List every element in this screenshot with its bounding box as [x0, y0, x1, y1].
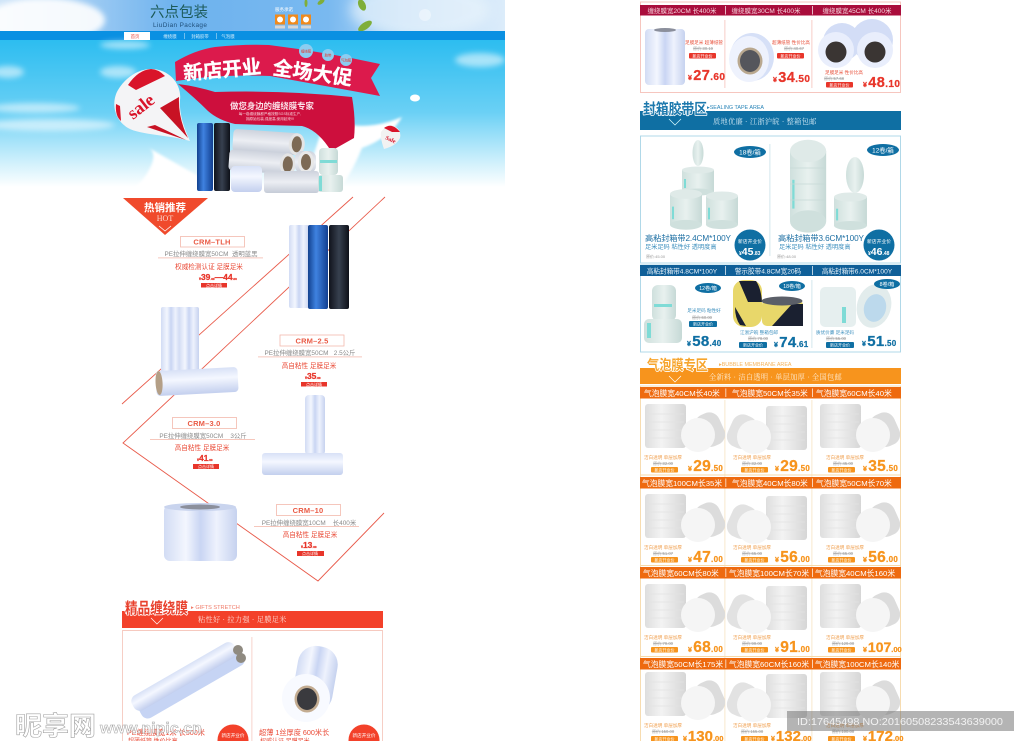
bubble film row 1: 洁白透明 单层加厚 — [733, 454, 771, 461]
product CRM-2.5: ¥35.00 — [305, 371, 321, 381]
panel: tape small: 质优价廉 足米足码 — [816, 329, 854, 336]
panel: bubble film frame — [640, 386, 901, 741]
bubble film row 1: 新店开业价 — [654, 466, 674, 472]
panel: tape large: 新店开业价 — [738, 238, 762, 245]
bubble film row 2: 气泡膜宽50CM长70米 — [816, 478, 892, 488]
roll: two upright one lying — [155, 307, 239, 396]
red diagonal lines — [122, 197, 385, 581]
tape stack 1 — [670, 140, 738, 230]
product CRM-10: 高自粘性 足膜足米 — [283, 530, 338, 539]
ribbon: 做您身边的缠绕膜专家 — [230, 101, 314, 111]
page header — [0, 0, 505, 42]
badge: 18卷/箱 — [783, 282, 801, 290]
bubble film row 4: 原价:190.00 — [832, 729, 855, 734]
panel: stretch film products: 超薄 1丝厚度 600米长 — [259, 728, 329, 737]
bubble film row 3: ¥68.00 — [688, 639, 723, 656]
panel: tape large — [640, 136, 900, 263]
panel: stretch film by size: 新店开业价 — [780, 52, 800, 58]
product CRM-2.5: PE拉伸缠绕膜宽50CM 2.5公斤 — [265, 348, 355, 357]
badge 18: 18卷/箱 — [739, 148, 761, 156]
panel: tape small: 警示胶带4.8CM宽20码 — [735, 266, 802, 276]
sale balloon — [114, 69, 190, 141]
panel: tape large: 高粘封箱带3.6CM*100Y — [778, 233, 865, 243]
bubble film row 3: 新店开业价 — [744, 646, 764, 652]
product CRM-3.0 — [150, 418, 255, 469]
product CRM-10 — [254, 504, 359, 556]
roll 30cm — [729, 33, 774, 82]
small balloon: Sale — [384, 135, 397, 145]
badge 12 — [867, 144, 899, 156]
product CRM-2.5: 高自粘性 足膜足米 — [282, 361, 337, 370]
bubble film row 3: ¥91.00 — [775, 639, 810, 656]
bubble film row 2: ¥56.00 — [775, 549, 810, 566]
bubble film row 3: 气泡膜宽40CM长160米 — [815, 568, 895, 578]
product CRM-10: ¥13.00 — [301, 540, 317, 550]
bubble film row 4: 原价:150.00 — [652, 729, 675, 734]
bubble film row 1: 新店开业价 — [832, 466, 852, 472]
product CRM-TLH: ¥39.00—44.00 — [199, 272, 237, 282]
navigation bar: 封箱胶带 — [191, 33, 209, 40]
hazard tape — [733, 280, 803, 327]
navigation bar — [0, 31, 505, 40]
bubble film row 4 — [640, 658, 904, 741]
badge 12: 12卷/箱 — [872, 146, 894, 154]
bubble film row 2: 原价:51.07 — [653, 551, 674, 556]
hot badge — [123, 198, 208, 235]
bubble film row 3: 气泡膜宽60CM长80米 — [643, 568, 719, 578]
panel: tape small: 高粘封箱带6.0CM*100Y — [822, 266, 893, 276]
roll: T shape — [262, 395, 343, 475]
logo — [150, 4, 208, 29]
bubble film row 1: 洁白透明 单层加厚 — [644, 454, 682, 461]
bubble film row 2: ¥56.00 — [863, 549, 898, 566]
bubble film row 1: 原价:32.00 — [653, 461, 674, 466]
roll 20cm — [645, 28, 685, 85]
product CRM-TLH: 点击详情 — [206, 282, 222, 288]
bubble film row 1: ¥29.50 — [688, 458, 723, 475]
sale balloon: sale — [123, 90, 158, 123]
product CRM-TLH — [158, 236, 263, 288]
panel: tape small: 新店开业价 — [830, 342, 850, 348]
panel: tape large: ¥45.83 — [739, 246, 761, 258]
panel: tape small: 原价:60.00 — [692, 315, 713, 320]
ribbon: 新店开业 — [183, 56, 262, 85]
panel: stretch film by size: 原价:57.68 — [824, 76, 845, 81]
bubble film row 2: ¥47.00 — [688, 549, 723, 566]
badge — [695, 279, 900, 293]
watermark: site logo: www.nipic.cn — [99, 721, 202, 737]
bubble film row 2 — [640, 477, 904, 566]
bubble film row 3: 原价:79.00 — [653, 641, 674, 646]
panel: stretch film by size: ¥27.60 — [688, 68, 725, 84]
tape 6.0 — [820, 280, 896, 332]
section: bubble film: ▸BUBBLE MEMBRANE AREA — [719, 362, 792, 368]
section: stretch film — [122, 599, 383, 628]
panel: tape small — [640, 265, 901, 352]
product CRM-TLH: PE拉伸缠绕膜宽50CM 透明蓝黑 — [164, 249, 258, 258]
roll: three colours — [289, 225, 349, 309]
watermark: image id — [787, 711, 1014, 731]
product CRM-10: PE拉伸缠绕膜宽10CM 长400米 — [262, 518, 357, 527]
panel: tape large: 原价:45.00 — [646, 254, 666, 259]
product rolls — [197, 123, 343, 193]
bubble film row 2: 洁白透明 单层加厚 — [826, 544, 864, 551]
bubble film row 3: 新店开业价 — [832, 646, 852, 652]
product CRM-TLH: 权威检测认证 足膜足米 — [175, 262, 243, 271]
panel: stretch film by size: 足膜足米 超薄纸管 — [685, 39, 723, 46]
panel: stretch film products: 新店开业价 — [353, 732, 376, 739]
bubble film row 1: 原价:32.00 — [742, 461, 763, 466]
navigation bar: 缠绕膜 — [163, 33, 177, 40]
panel: stretch film by size: 缠绕膜宽30CM 长400米 — [732, 6, 801, 15]
bubble film row 3: 原价:129.00 — [832, 641, 855, 646]
section: sealing tape: 封箱胶带区 — [643, 100, 707, 118]
bubble film row 3: 洁白透明 单层加厚 — [733, 634, 771, 641]
bubble film row 1: 气泡膜宽50CM长35米 — [732, 388, 808, 398]
ribbon — [175, 45, 380, 151]
bubble film row 2: 洁白透明 单层加厚 — [733, 544, 771, 551]
panel: tape small: 足米足码 粘性好 — [687, 307, 721, 314]
category bubbles: 缠绕膜 — [301, 48, 312, 54]
panel: tape large: 高粘封箱带2.4CM*100Y — [645, 233, 732, 243]
service promise icons: 服务承诺 — [275, 6, 293, 13]
hero banner — [0, 40, 505, 200]
upright roll — [282, 643, 341, 722]
roll 45cm — [818, 19, 893, 68]
panel: stretch film by size: 原价:40.67 — [784, 46, 805, 51]
section: sealing tape: ▸SEALING TAPE AREA — [707, 105, 764, 111]
panel: stretch film by size: 新店开业价 — [830, 82, 850, 88]
tape 4.8 — [644, 285, 682, 343]
panel: tape large: ¥46.48 — [868, 246, 890, 258]
panel: tape large: 足米足码 粘性好 透明度高 — [779, 243, 850, 251]
product CRM-2.5: 点击详情 — [306, 381, 322, 387]
bubble film row 1: 新店开业价 — [744, 466, 764, 472]
panel: tape small: ¥74.61 — [774, 334, 809, 351]
badge: 8卷/箱 — [880, 280, 894, 288]
bubble film row 1: 原价:45.00 — [833, 461, 854, 466]
bubble film row 4: 气泡膜宽50CM长175米 — [643, 659, 723, 669]
panel: tape small: 新店开业价 — [693, 320, 713, 326]
diagonal rolls — [129, 640, 247, 721]
bubble film row 4: 洁白透明 单层加厚 — [826, 722, 864, 729]
bubble film row 3: 洁白透明 单层加厚 — [826, 634, 864, 641]
bubble film row 4: 洁白透明 单层加厚 — [733, 722, 771, 729]
bubble film row 3: 新店开业价 — [654, 646, 674, 652]
product CRM-3.0: ¥41.00 — [197, 453, 213, 463]
milk splash — [112, 117, 402, 199]
product CRM-TLH: CRM–TLH — [193, 238, 231, 246]
panel: stretch film products: PE缠绕膜宽1米 长500米 — [127, 728, 205, 737]
bubble film row 3: 原价:99.00 — [742, 641, 763, 646]
bubble film row 4: 原价:155.00 — [741, 729, 764, 734]
section: bubble film: 气泡膜专区 — [647, 357, 708, 373]
panel: stretch film by size: 缠绕膜宽45CM 长400米 — [822, 6, 892, 15]
bubble film row 4: 洁白透明 单层加厚 — [644, 722, 682, 729]
roll: short fat — [164, 503, 237, 561]
bubble film row 3: 气泡膜宽100CM长70米 — [729, 568, 809, 578]
panel: stretch film by size: 缠绕膜宽20CM 长400米 — [648, 6, 717, 15]
ribbon: 每一卷缠绕膜都严格按照SGS标准生产, — [239, 111, 301, 116]
bubble film row 1 — [640, 387, 904, 475]
category bubbles: 气泡膜 — [341, 58, 352, 62]
section: sealing tape — [640, 100, 901, 130]
panel: tape large: 新店开业价 — [867, 238, 891, 245]
logo: LiuDian Package — [153, 22, 207, 29]
bubble film row 2: 新店开业价 — [744, 556, 764, 562]
bubble film row 2: 洁白透明 单层加厚 — [644, 544, 682, 551]
bubble film row 1: ¥35.50 — [863, 458, 898, 475]
navigation bar: 气泡膜 — [221, 33, 235, 40]
section: bubble film — [640, 357, 901, 384]
bubble film row 2: 气泡膜宽40CM长80米 — [732, 478, 808, 488]
bubble film row 2: 新店开业价 — [654, 556, 674, 562]
panel: stretch film products — [122, 630, 382, 741]
bubble film row 3: 洁白透明 单层加厚 — [644, 634, 682, 641]
bubble film row 1: 气泡膜宽60CM长40米 — [816, 388, 892, 398]
panel: tape small: 高粘封箱带4.8CM*100Y — [647, 266, 718, 276]
product CRM-3.0: CRM–3.0 — [187, 419, 221, 428]
badge 18 — [734, 146, 766, 158]
section: sealing tape: 质地优廉 · 江浙沪皖 · 整箱包邮 — [713, 117, 817, 126]
bubble film row 2: 新店开业价 — [832, 556, 852, 562]
panel: stretch film by size: ¥48.10 — [863, 75, 900, 91]
panel: stretch film by size — [640, 2, 901, 92]
panel: stretch film products: 新店开业价 — [222, 732, 245, 739]
product CRM-3.0: 高自粘性 足膜足米 — [175, 443, 230, 452]
panel: stretch film by size: 超薄纸管 性价比高 — [772, 39, 810, 46]
panel: tape small: ¥58.40 — [687, 333, 722, 350]
product CRM-2.5 — [258, 335, 362, 387]
bubble film row 1: 洁白透明 单层加厚 — [826, 454, 864, 461]
panel: tape large: 足米足码 粘性好 透明度高 — [645, 243, 716, 251]
bubble film row 2: 原价:65.00 — [742, 551, 763, 556]
panel: stretch film by size: 原价:30.19 — [693, 46, 714, 51]
panel: tape small: 新店开业价 — [743, 342, 763, 348]
section: stretch film: 精品缠绕膜 — [125, 599, 188, 617]
ribbon: 全场大促 — [271, 56, 354, 90]
panel: tape small: 原价:78.00 — [748, 336, 769, 341]
product CRM-10: 点击详情 — [302, 550, 318, 556]
bubble film row 2: 气泡膜宽100CM长35米 — [642, 478, 722, 488]
section: bubble film: 全新料 · 洁白透明 · 单层加厚 · 全国包邮 — [709, 372, 842, 382]
bubble film row 3: ¥107.00 — [863, 639, 902, 655]
watermark: site logo — [15, 711, 202, 741]
section: stretch film: ▸ GIFTS STRETCH — [191, 605, 240, 611]
product CRM-3.0: PE拉伸缠绕膜宽50CM 3公斤 — [159, 431, 247, 440]
bubble film row 2: 原价:65.00 — [833, 551, 854, 556]
ribbon: 拥原始包装,强度高,使用起来!!! — [246, 116, 294, 121]
tape stack 2 — [790, 140, 867, 233]
hot badge: HOT — [157, 214, 173, 223]
hot badge: 热销推荐 — [144, 201, 186, 214]
leaves — [304, 0, 374, 33]
panel: stretch film by size: ¥34.50 — [773, 70, 810, 86]
bubble film row 1: ¥29.50 — [775, 458, 810, 475]
bubble film row 4: 气泡膜宽100CM长140米 — [815, 659, 900, 669]
product CRM-3.0: 点击详情 — [198, 463, 214, 469]
panel: tape small: ¥51.50 — [862, 333, 897, 350]
panel: stretch film by size: 足膜足米 性价比高 — [825, 69, 863, 76]
watermark: site logo: 昵享网 — [15, 711, 96, 741]
panel: stretch film by size: 新店开业价 — [692, 52, 712, 58]
panel: tape small: 原价:55.00 — [826, 336, 847, 341]
panel: tape large: 原价:48.00 — [777, 254, 797, 259]
bubble film row 3 — [640, 567, 904, 656]
panel: tape small: 江浙沪皖 整箱包邮 — [740, 329, 778, 336]
bubble film row 4: 气泡膜宽60CM长160米 — [729, 659, 809, 669]
logo: 六点包装 — [150, 4, 208, 21]
bubble film row 1: 气泡膜宽40CM长40米 — [644, 388, 720, 398]
service promise icons — [275, 6, 311, 28]
product CRM-2.5: CRM–2.5 — [295, 336, 329, 346]
section: stretch film: 粘性好 · 拉力强 · 足膜足米 — [198, 615, 287, 624]
category bubbles — [299, 44, 352, 66]
badge: 12卷/箱 — [699, 284, 717, 292]
navigation bar: 首页 — [131, 33, 140, 40]
watermark: image id: ID:17645498 NO:20160508233543639000 — [797, 717, 1003, 728]
category bubbles: 胶带 — [325, 52, 332, 58]
product CRM-10: CRM–10 — [293, 506, 323, 515]
small balloon — [381, 125, 400, 149]
